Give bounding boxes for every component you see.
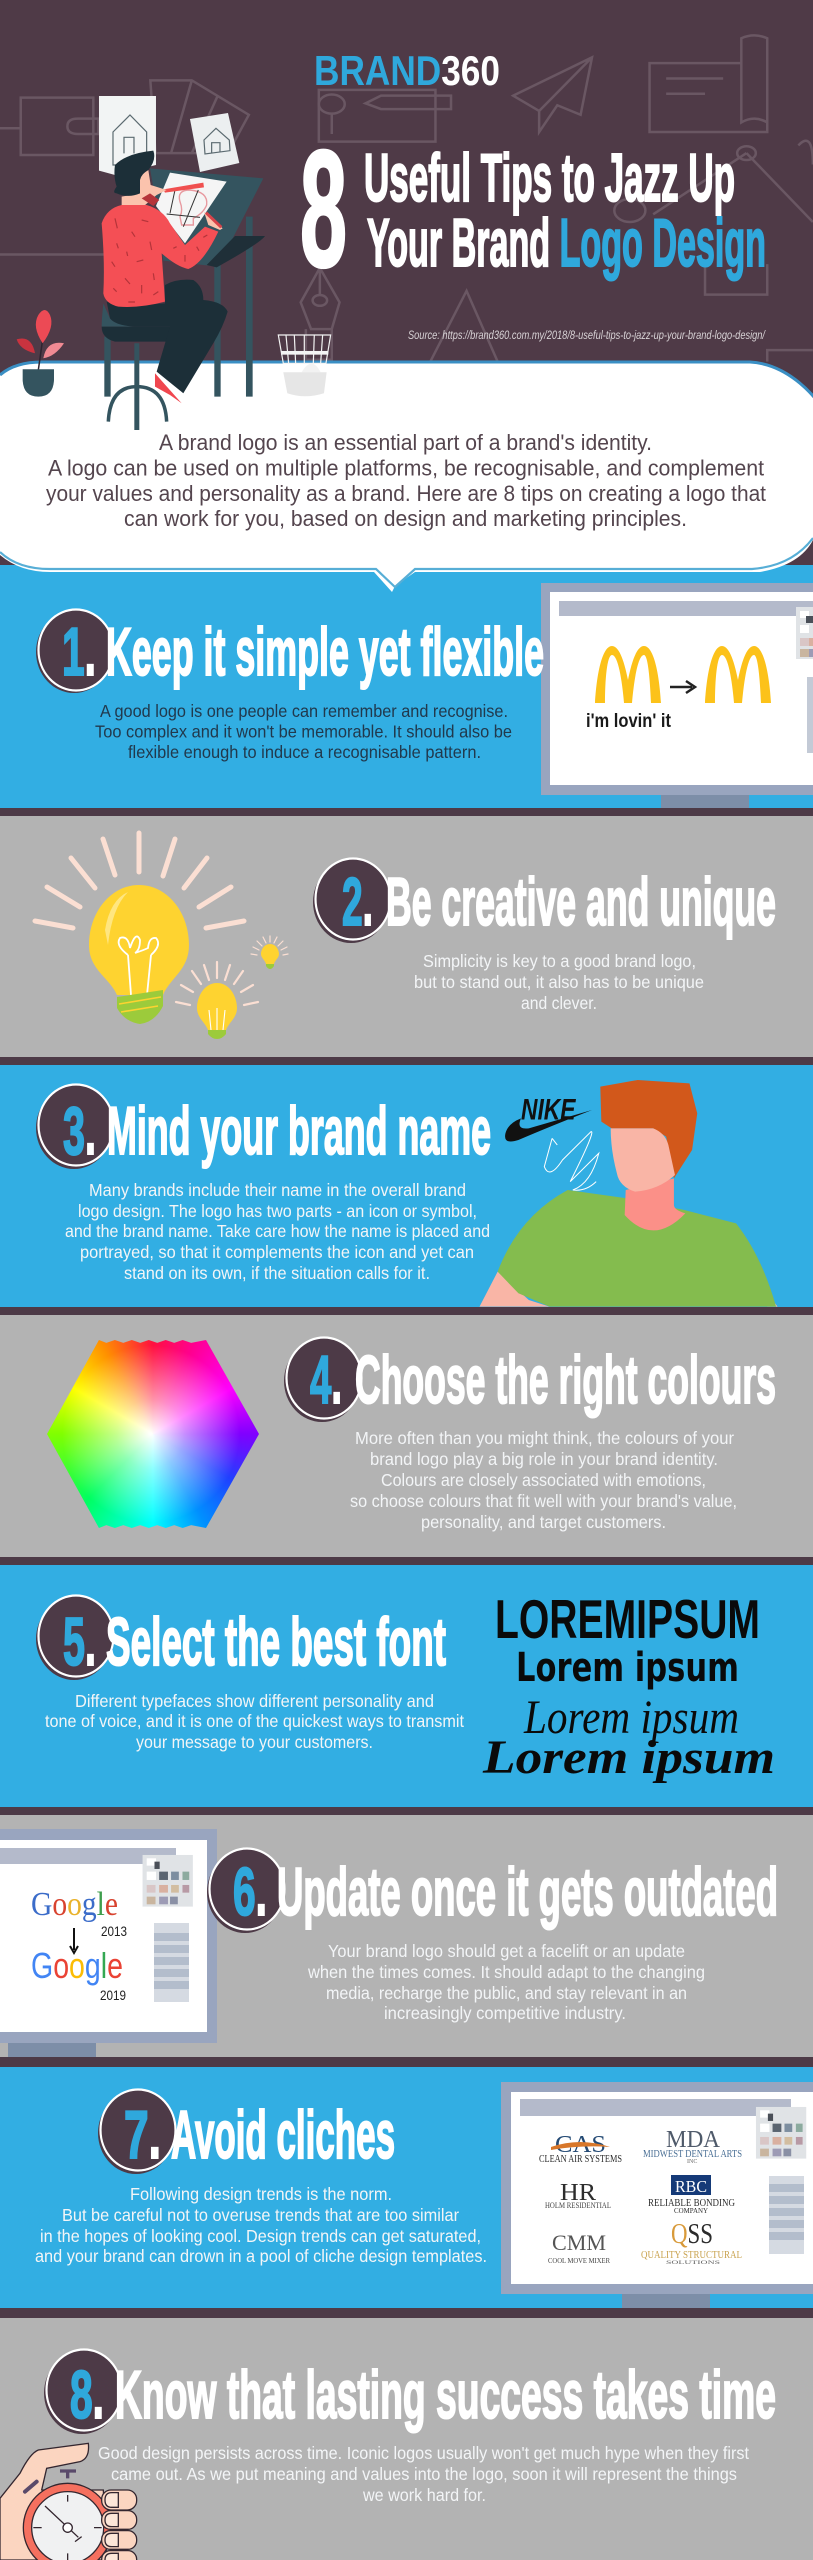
sample logos: CLEAN AIR SYSTEMS: [539, 2154, 622, 2165]
body 3: and the brand name. Take care how the name is placed and: [65, 1221, 490, 1241]
Nike logo: [505, 1093, 592, 1141]
colour wheel hexagon: [47, 1340, 259, 1528]
body 3: logo design. The logo has two parts - an icon or symbol,: [78, 1201, 477, 1221]
body 2: but to stand out, it also has to be unique: [414, 972, 704, 992]
sidebar list: [154, 1923, 189, 2002]
body 1: [95, 701, 512, 762]
badge 2: [313, 858, 390, 943]
body 6: media, recharge the public, and stay relevant in an: [326, 1983, 687, 2003]
badge 6: [207, 1848, 284, 1933]
monitor with Google logos: 2019: [100, 1987, 126, 2003]
monitor with McDonald's logos: i'm lovin' it: [586, 711, 672, 732]
sample logos: CAS: [555, 2132, 606, 2158]
badge 4: 4.: [310, 1342, 342, 1418]
sample logos: [539, 2127, 742, 2266]
drafting table: [150, 168, 265, 397]
body 4: so choose colours that fit well with your brand's value,: [350, 1491, 737, 1511]
sidebar list: [769, 2176, 804, 2254]
stool: [102, 303, 170, 430]
waste bin: [278, 335, 331, 396]
body 5: Different typefaces show different personality and: [75, 1691, 434, 1711]
sample logos: MDA: [666, 2127, 721, 2153]
badge 8: [44, 2350, 122, 2434]
badge 7: [98, 2090, 176, 2174]
panel: tip 1: [36, 583, 813, 808]
panel: tip 5: [0, 1565, 813, 1807]
sample logos: MIDWEST DENTAL ARTS: [643, 2149, 742, 2160]
sample logos: COOL MOVE MIXER: [548, 2257, 610, 2265]
panel: tip 7: [0, 2067, 813, 2308]
header panel: [0, 0, 813, 600]
sample logos: CMM: [552, 2230, 606, 2255]
font samples: Lorem ipsum: [523, 1691, 739, 1744]
sample logos: COMPANY: [674, 2206, 709, 2215]
badge 1: [36, 610, 114, 693]
sample logos: HOLM RESIDENTIAL: [545, 2201, 611, 2210]
body 6: [307, 1941, 705, 2023]
sample logos: SOLUTIONS: [666, 2260, 720, 2266]
illustration: hand with stopwatch: [0, 2443, 137, 2560]
illustration: person thinking of Nike logo: [480, 1080, 778, 1307]
panel: tip 8: [0, 2318, 813, 2560]
Nike logo: NIKE: [521, 1093, 576, 1126]
monitor with Google logos: [0, 1829, 217, 2057]
body 2: [414, 951, 704, 1013]
body 7: [35, 2184, 487, 2266]
font samples: Lorem ipsum: [516, 1645, 739, 1691]
body 6: when the times comes. It should adapt to the changing: [307, 1962, 705, 1982]
background icons: faint design tools: [0, 35, 813, 362]
body 1: A good logo is one people can remember and recognise.: [100, 701, 508, 721]
monitor with McDonald's logos: [541, 583, 813, 808]
body 6: increasingly competitive industry.: [384, 2003, 626, 2023]
body 4: More often than you might think, the colours of your: [355, 1428, 734, 1448]
body 5: [45, 1691, 464, 1752]
intro paragraph: A logo can be used on multiple platforms, be recognisable, and complement: [48, 456, 765, 480]
sample logos: RELIABLE BONDING: [648, 2197, 735, 2209]
badge 7: 7.: [124, 2097, 161, 2173]
body 4: personality, and target customers.: [421, 1512, 666, 1532]
plant: [17, 310, 64, 397]
font samples: [482, 1588, 775, 1784]
colour palette: [143, 1855, 193, 1907]
intro paragraph: your values and personality as a brand. Here are 8 tips on creating a logo that: [46, 481, 767, 506]
body 3: portrayed, so that it complements the icon and yet can: [80, 1242, 474, 1262]
sample logos: INC: [687, 2159, 697, 2165]
illustration: light bulbs: [35, 833, 288, 1039]
badge 3: 3.: [63, 1093, 96, 1169]
body 2: and clever.: [521, 993, 597, 1013]
badge 8: 8.: [70, 2357, 104, 2433]
panel: tip 4: [0, 1315, 813, 1557]
badge 3: [36, 1084, 114, 1169]
logo: BRAND360: BRAND360: [314, 47, 500, 94]
body 7: Following design trends is the norm.: [130, 2184, 392, 2204]
badge 1: 1.: [62, 614, 96, 690]
body 8: Good design persists across time. Iconic logos usually won't get much hype when they first: [98, 2443, 749, 2463]
badge 4: [284, 1338, 362, 1422]
panel: tip 6: [0, 1815, 813, 2057]
sample logos: HR: [560, 2180, 596, 2206]
body 7: and your brand can drown in a pool of cliche design templates.: [35, 2246, 487, 2266]
body 8: [98, 2443, 749, 2505]
sample logos: QUALITY STRUCTURAL: [641, 2250, 742, 2261]
sample logos: QSS: [671, 2219, 713, 2250]
panel: tip 3: [0, 1065, 813, 1307]
intro paragraph: can work for you, based on design and marketing principles.: [124, 506, 687, 531]
monitor with Google logos: Google: [31, 1945, 123, 1986]
body 4: brand logo play a big role in your brand identity.: [370, 1449, 718, 1469]
body 7: in the hopes of looking cool. Design trends can get saturated,: [40, 2226, 481, 2246]
body 7: But be careful not to overuse trends that are too similar: [62, 2205, 459, 2225]
badge 6: 6.: [233, 1854, 267, 1930]
body 1: flexible enough to induce a recognisable pattern.: [128, 742, 481, 762]
intro paragraph: A brand logo is an essential part of a brand's identity.: [159, 430, 652, 455]
wall sketches: [99, 96, 239, 175]
font samples: Lorem ipsum: [482, 1731, 775, 1784]
body 8: came out. As we put meaning and values into the logo, soon it will represent the things: [111, 2464, 737, 2484]
illustration: designer at drafting table: [17, 96, 331, 430]
designer: [102, 151, 228, 403]
title: large number 8: 8: [300, 117, 347, 302]
divider bars: [0, 808, 813, 2318]
body 3: [65, 1180, 490, 1283]
body 2: Simplicity is key to a good brand logo,: [423, 951, 696, 971]
body 8: we work hard for.: [362, 2485, 486, 2505]
monitor with cliche logos: [501, 2082, 813, 2308]
heading 7: Avoid cliches: [171, 2097, 395, 2173]
speech bubble: intro: [0, 362, 813, 592]
body 1: Too complex and it won't be memorable. It should also be: [95, 722, 512, 742]
badge 5: [36, 1596, 114, 1680]
body 3: Many brands include their name in the overall brand: [89, 1180, 466, 1200]
intro paragraph: [46, 430, 767, 531]
monitor with Google logos: 2013: [101, 1923, 127, 1939]
body 5: tone of voice, and it is one of the quickest ways to transmit: [45, 1711, 464, 1731]
badge 5: 5.: [63, 1604, 96, 1680]
body 4: Colours are closely associated with emotions,: [381, 1470, 706, 1490]
heading 5: Select the best font: [106, 1604, 446, 1680]
monitor with Google logos: Google: [31, 1886, 118, 1923]
badge 2: 2.: [342, 864, 373, 940]
body 5: your message to your customers.: [136, 1732, 373, 1752]
body 6: Your brand logo should get a facelift or an update: [328, 1941, 685, 1961]
panel: tip 2: [0, 816, 813, 1057]
colour palette: [756, 2107, 806, 2159]
sample logos: RBC: [675, 2177, 707, 2196]
blue section 1 background: [0, 565, 813, 808]
body 4: [350, 1428, 737, 1532]
body 3: stand on its own, if the situation calls for it.: [124, 1263, 430, 1283]
